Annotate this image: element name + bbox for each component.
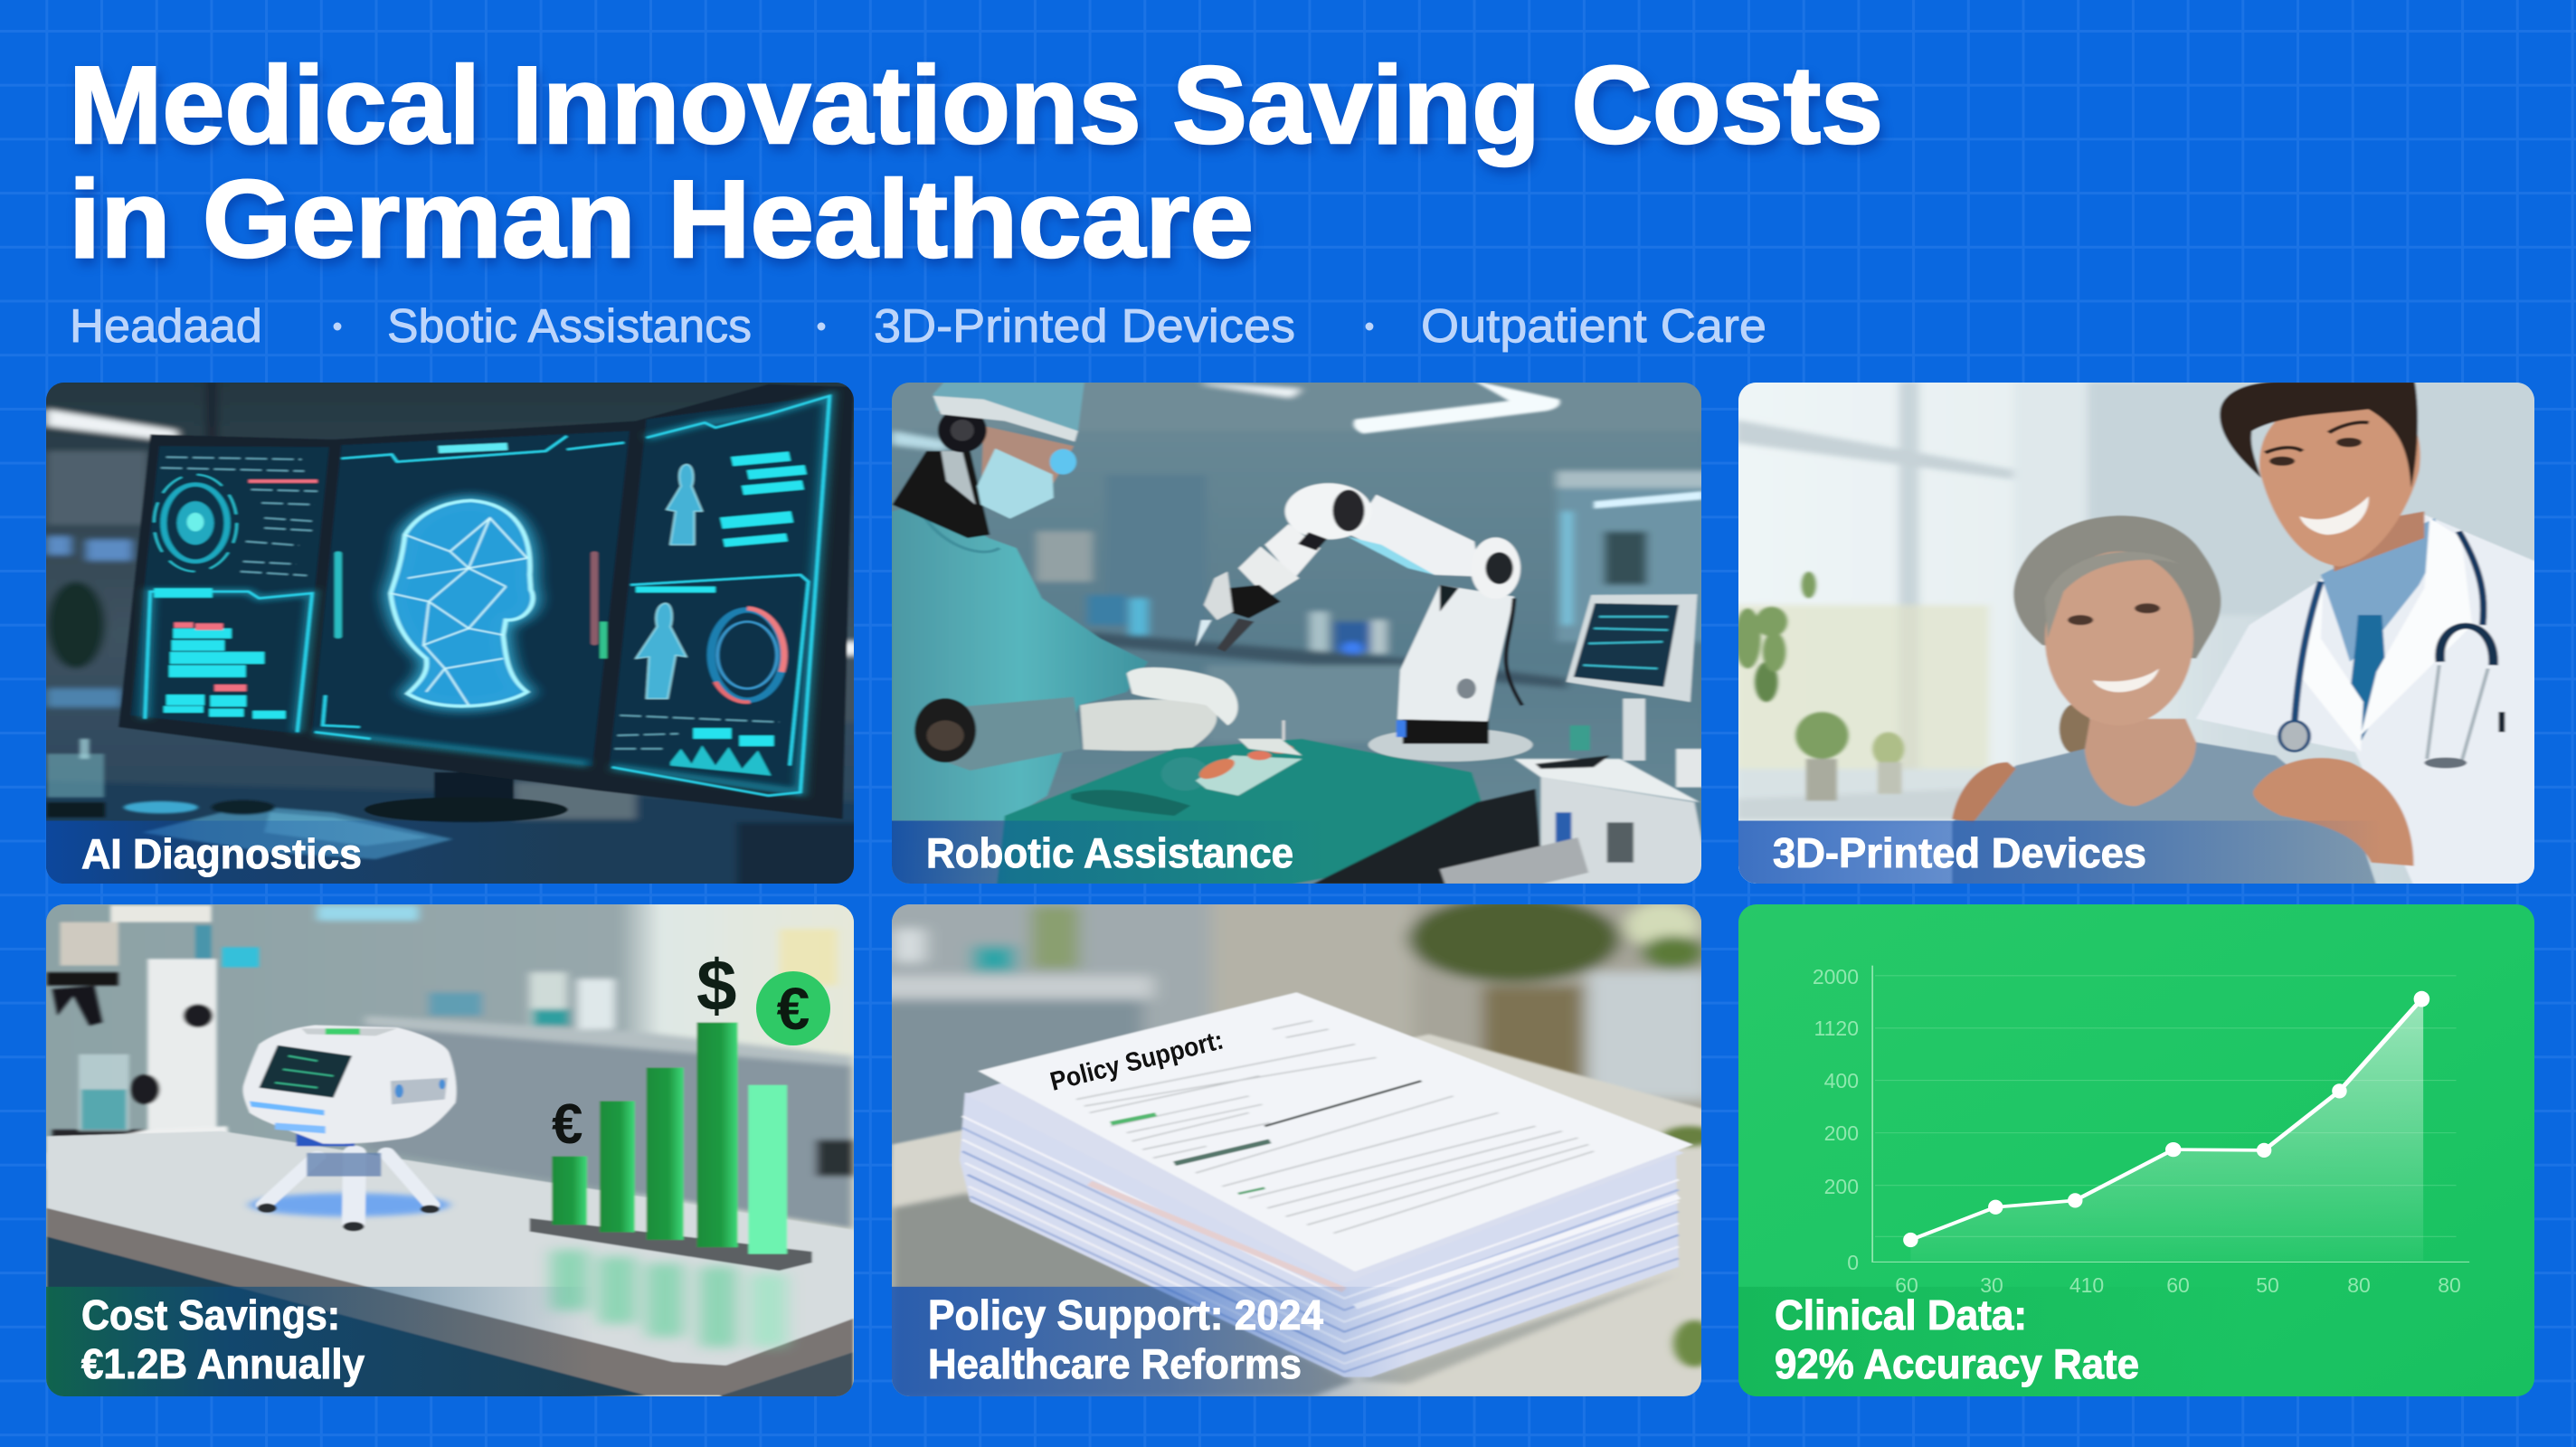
icon: holographic head	[391, 501, 533, 706]
subtitle tags: 3D-Printed Devices	[874, 300, 1295, 353]
surgical drape and tissue	[997, 721, 1482, 884]
chart axis labels: 200	[1824, 1121, 1859, 1145]
paper stack	[960, 992, 1693, 1377]
ceiling light	[1353, 381, 1560, 434]
title: in German Healthcare	[69, 157, 1254, 280]
chart axis labels: 2000	[1813, 965, 1859, 988]
caption: €1.2B Annually	[81, 1340, 365, 1387]
surgeon	[892, 383, 1238, 821]
panel: Clinical Data	[1719, 904, 2534, 1411]
title	[69, 43, 1883, 280]
chart axis labels: 200	[1824, 1175, 1859, 1198]
caption	[81, 1291, 365, 1387]
desk	[892, 1035, 1716, 1397]
caption	[928, 1291, 1323, 1387]
caption: 3D-Printed Devices	[1773, 829, 2146, 876]
panel: Robotic Assistance	[877, 371, 1710, 895]
caption: 92% Accuracy Rate	[1775, 1340, 2139, 1387]
chart axis labels	[1813, 965, 2461, 1297]
caption	[1775, 1291, 2139, 1387]
icon: euro symbol: €	[552, 1093, 582, 1156]
triple monitor	[118, 384, 854, 819]
chart axis labels: 400	[1824, 1069, 1859, 1092]
subtitle tags: Outpatient Care	[1421, 300, 1766, 353]
subtitle tags: Headaad	[70, 300, 262, 353]
panel: AI Diagnostics	[36, 371, 869, 895]
icon: monitor stand	[365, 772, 568, 822]
chart axis labels: 0	[1847, 1251, 1859, 1274]
doctor	[2196, 382, 2536, 886]
caption: Clinical Data:	[1775, 1291, 2027, 1338]
caption: Healthcare Reforms	[928, 1340, 1302, 1387]
icon: dollar symbol: $	[696, 945, 736, 1026]
subtitle tags	[70, 300, 1766, 353]
title: Medical Innovations Saving Costs	[69, 43, 1883, 166]
chart axis labels: 80	[2438, 1273, 2461, 1297]
robotic arm	[1196, 483, 1533, 761]
panel: Cost Savings	[36, 895, 868, 1420]
document heading: Policy Support:	[1047, 1026, 1226, 1097]
icon: euro coin	[756, 971, 830, 1045]
chart axis labels: 80	[2347, 1273, 2371, 1297]
plant	[1735, 572, 1904, 800]
icon: glass beaker	[47, 739, 104, 798]
chart axis labels: 30	[1980, 1273, 2003, 1297]
sidebar indicators	[335, 552, 342, 638]
line chart	[1719, 966, 2469, 1411]
chart axis labels: 410	[2069, 1273, 2104, 1297]
caption: Cost Savings:	[81, 1291, 340, 1338]
icon: euro coin: €	[777, 975, 810, 1042]
chart axis labels: 50	[2256, 1273, 2279, 1297]
icon: hologram figures	[636, 465, 702, 699]
monitor	[1567, 594, 1697, 761]
chart axis labels: 1120	[1814, 1017, 1859, 1040]
panel: 3D-Printed Devices	[1738, 383, 2534, 884]
caption: Policy Support: 2024	[928, 1291, 1323, 1338]
panel: Policy Support	[877, 895, 1716, 1420]
caption: Robotic Assistance	[926, 829, 1293, 876]
subtitle tags: Sbotic Assistancs	[387, 300, 752, 353]
chart axis labels: 60	[1895, 1273, 1918, 1297]
equipment cart	[1312, 725, 1710, 884]
robot device	[243, 1026, 457, 1231]
caption: AI Diagnostics	[81, 830, 362, 877]
savings bar chart	[530, 1023, 812, 1271]
table	[47, 1131, 854, 1411]
icon: microscope	[47, 905, 259, 1169]
chart axis labels: 60	[2166, 1273, 2190, 1297]
patient	[1952, 515, 2414, 886]
icon: scan ring	[154, 475, 237, 572]
icon: keyboard and mouse	[47, 800, 453, 859]
icon: gauge ring	[711, 609, 784, 702]
